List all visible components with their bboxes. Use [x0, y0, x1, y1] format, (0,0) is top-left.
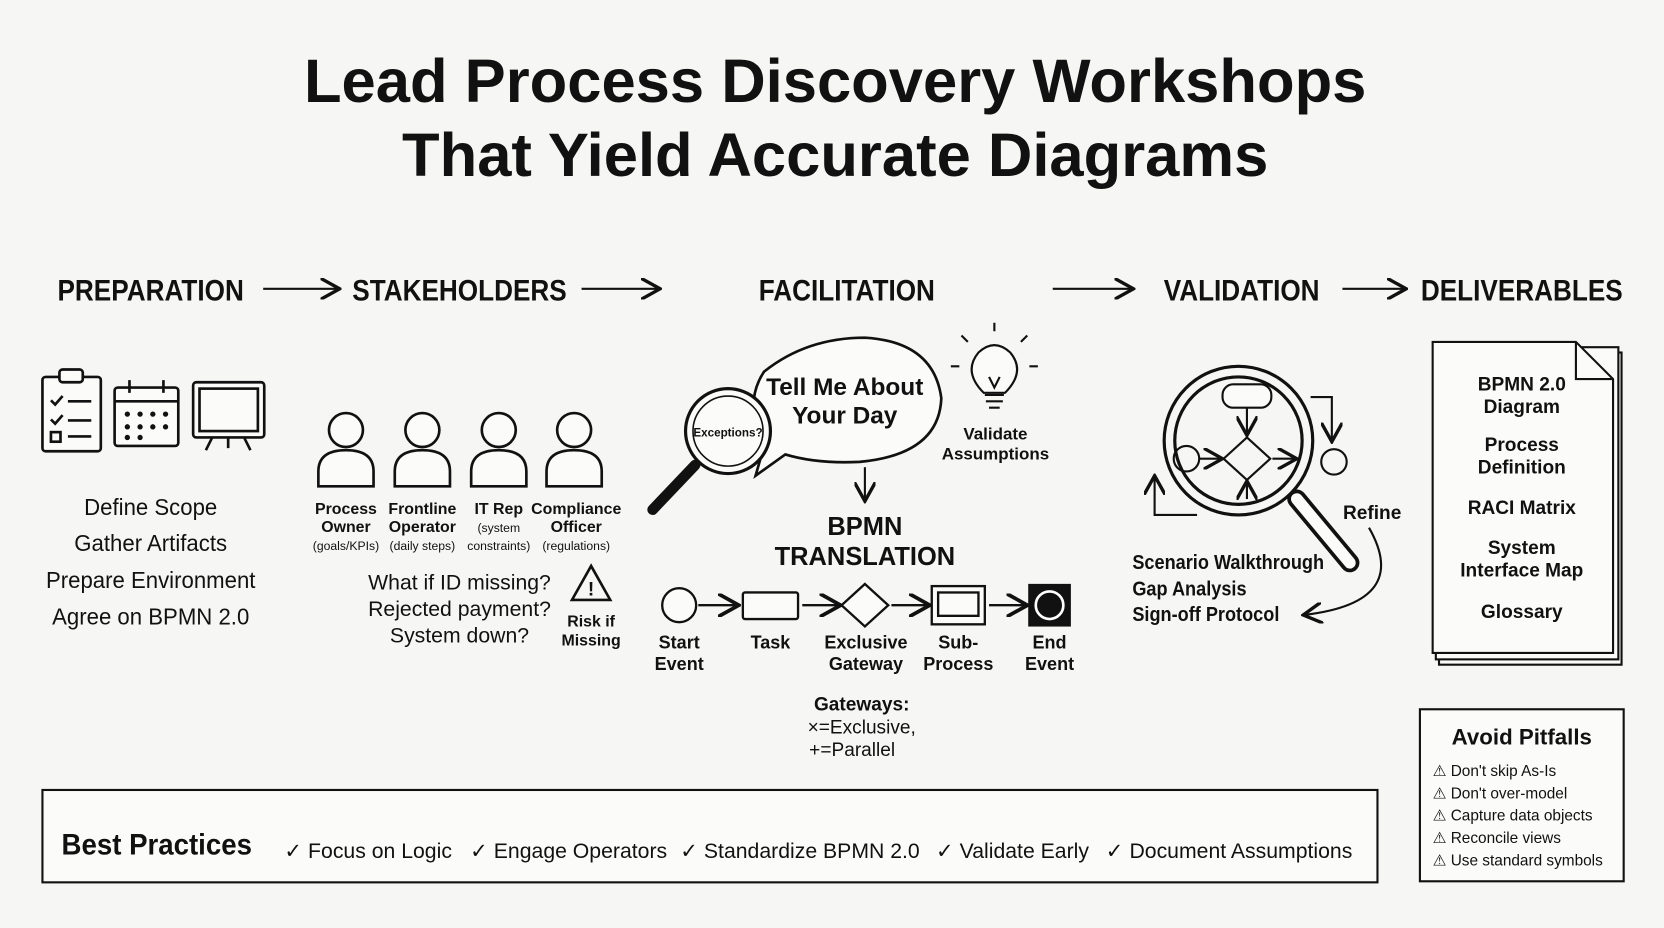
arrow down: [864, 467, 866, 499]
text: preparation steps: Agree on BPMN 2.0: [52, 603, 249, 629]
panel: avoid pitfalls: ⚠ Capture data objects: [1433, 808, 1593, 825]
stage headings: FACILITATION: [759, 274, 935, 307]
BPMN labels: Sub-: [938, 633, 978, 653]
text: stakeholder roles: [313, 501, 621, 553]
heading: BPMN translation: [775, 513, 955, 571]
text: gateways: Gateways:: [814, 694, 909, 715]
text: validation steps: Scenario Walkthrough: [1132, 552, 1324, 574]
text: stakeholder roles: Officer: [551, 519, 602, 536]
text: validation steps: Sign-off Protocol: [1132, 604, 1279, 626]
panel: best practices: [42, 790, 1377, 882]
icon: risk warning: [562, 566, 621, 650]
panel: deliverables document: RACI Matrix: [1468, 498, 1576, 519]
panel: deliverables document: Interface Map: [1460, 561, 1583, 582]
panel: avoid pitfalls: [1420, 709, 1624, 881]
panel: best practices: ✓ Focus on Logic: [284, 840, 452, 863]
BPMN labels: Event: [655, 654, 704, 674]
panel: deliverables document: Definition: [1478, 458, 1566, 479]
speech bubble: Your Day: [792, 403, 898, 430]
BPMN labels: Process: [923, 654, 993, 674]
panel: best practices: ✓ Engage Operators: [470, 840, 667, 863]
text: exception questions: [368, 571, 551, 647]
text: exception questions: Rejected payment?: [368, 598, 551, 621]
title: [304, 47, 1366, 190]
BPMN labels: Exclusive: [824, 633, 908, 653]
icon: risk warning: Missing: [562, 633, 621, 650]
stage headings: DELIVERABLES: [1421, 274, 1623, 307]
text: stakeholder roles: (daily steps): [390, 539, 455, 553]
text: validation steps: [1132, 552, 1324, 626]
panel: deliverables document: [1433, 342, 1622, 665]
BPMN labels: Event: [1025, 654, 1074, 674]
text: stakeholder roles: Frontline: [388, 501, 457, 518]
panel: deliverables document: BPMN 2.0: [1478, 375, 1566, 396]
text: stakeholder roles: IT Rep: [474, 501, 523, 518]
icon: magnifier exceptions: Exceptions?: [693, 426, 763, 439]
icon: risk warning: !: [588, 580, 594, 601]
panel: best practices: ✓ Standardize BPMN 2.0: [680, 840, 920, 863]
icon: risk warning: Risk if: [567, 613, 616, 630]
stage headings: VALIDATION: [1164, 274, 1320, 307]
text: validate assumptions: [942, 425, 1049, 464]
text: exception questions: What if ID missing?: [368, 571, 551, 594]
panel: deliverables document: System: [1488, 538, 1556, 559]
panel: deliverables document: Glossary: [1481, 602, 1563, 623]
panel: avoid pitfalls: ⚠ Use standard symbols: [1433, 852, 1603, 869]
text: preparation steps: Gather Artifacts: [74, 530, 227, 556]
text: validate assumptions: Assumptions: [942, 445, 1049, 464]
text: stakeholder roles: Owner: [321, 519, 371, 536]
BPMN labels: [655, 633, 1074, 674]
stage headings: STAKEHOLDERS: [352, 274, 567, 307]
BPMN labels: Gateway: [829, 654, 903, 674]
title: Lead Process Discovery Workshops: [304, 47, 1366, 116]
heading: BPMN translation: TRANSLATION: [775, 543, 955, 571]
arrows between stages: [263, 288, 1404, 290]
icon: magnifier exceptions: [653, 389, 770, 510]
text: stakeholder roles: constraints): [467, 539, 530, 553]
panel: best practices: ✓ Document Assumptions: [1106, 840, 1352, 863]
panel: avoid pitfalls: ⚠ Reconcile views: [1433, 830, 1561, 847]
text: exception questions: System down?: [390, 624, 529, 647]
text: validation steps: Gap Analysis: [1132, 579, 1247, 601]
text: stakeholder roles: Process: [315, 501, 377, 518]
panel: best practices: ✓ Validate Early: [936, 840, 1089, 863]
panel: avoid pitfalls: ⚠ Don't skip As-Is: [1433, 763, 1556, 780]
text: refine: Refine: [1343, 503, 1401, 524]
text: gateways: +=Parallel: [809, 740, 895, 761]
text: preparation steps: [46, 493, 256, 629]
text: preparation steps: Define Scope: [84, 493, 217, 520]
heading: BPMN translation: BPMN: [827, 513, 902, 541]
panel: preparation icons: [42, 370, 264, 451]
title: That Yield Accurate Diagrams: [402, 121, 1268, 190]
panel: stakeholders people: [318, 413, 602, 486]
panel: best practices: Best Practices: [62, 829, 252, 862]
icon: lightbulb: [951, 323, 1038, 408]
text: stakeholder roles: (goals/KPIs): [313, 539, 379, 553]
text: stakeholder roles: Operator: [389, 519, 456, 536]
text: stakeholder roles: Compliance: [531, 501, 621, 518]
BPMN labels: End: [1033, 633, 1067, 653]
text: gateways: ×=Exclusive,: [808, 718, 916, 739]
icon: validation magnifier: [1155, 366, 1381, 615]
panel: avoid pitfalls: ⚠ Don't over-model: [1433, 785, 1567, 802]
speech bubble: [753, 338, 941, 476]
text: stakeholder roles: (system: [477, 521, 520, 535]
panel: deliverables document: Diagram: [1484, 397, 1560, 418]
BPMN symbols row: [662, 584, 1070, 626]
text: preparation steps: Prepare Environment: [46, 567, 256, 593]
panel: avoid pitfalls: Avoid Pitfalls: [1452, 724, 1592, 749]
text: validate assumptions: Validate: [963, 425, 1027, 444]
stage headings: PREPARATION: [58, 274, 244, 307]
text: gateways: [808, 694, 916, 761]
BPMN labels: Task: [751, 633, 791, 653]
stage headings: [58, 274, 1623, 307]
panel: deliverables document: Process: [1485, 435, 1559, 456]
text: stakeholder roles: (regulations): [542, 539, 610, 553]
BPMN labels: Start: [659, 633, 700, 653]
speech bubble: Tell Me About: [766, 374, 923, 401]
